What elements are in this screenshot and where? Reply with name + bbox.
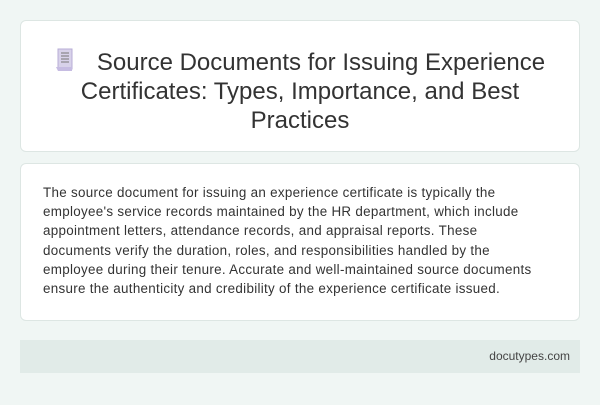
text block: employee's service records maintained by the HR department, which include <box>43 204 518 219</box>
footer <box>20 340 580 373</box>
footer: docutypes.com <box>489 349 570 363</box>
text block: appointment letters, attendance records, and appraisal reports. These <box>43 223 477 238</box>
panel: description <box>20 163 580 321</box>
title: Source Documents for Issuing Experience Certificates: Types, Importance, and Best Practices <box>81 49 545 134</box>
text block: ensure the authenticity and credibility of the experience certificate issued. <box>43 281 500 296</box>
icon: document <box>56 48 72 71</box>
text block: The source document for issuing an experience certificate is typically the <box>43 185 495 200</box>
text block: employee during their tenure. Accurate and well-maintained source documents <box>43 262 531 277</box>
text block <box>43 185 531 296</box>
panel: title card <box>20 20 580 152</box>
text block: documents verify the duration, roles, and responsibilities handled by the <box>43 243 490 258</box>
